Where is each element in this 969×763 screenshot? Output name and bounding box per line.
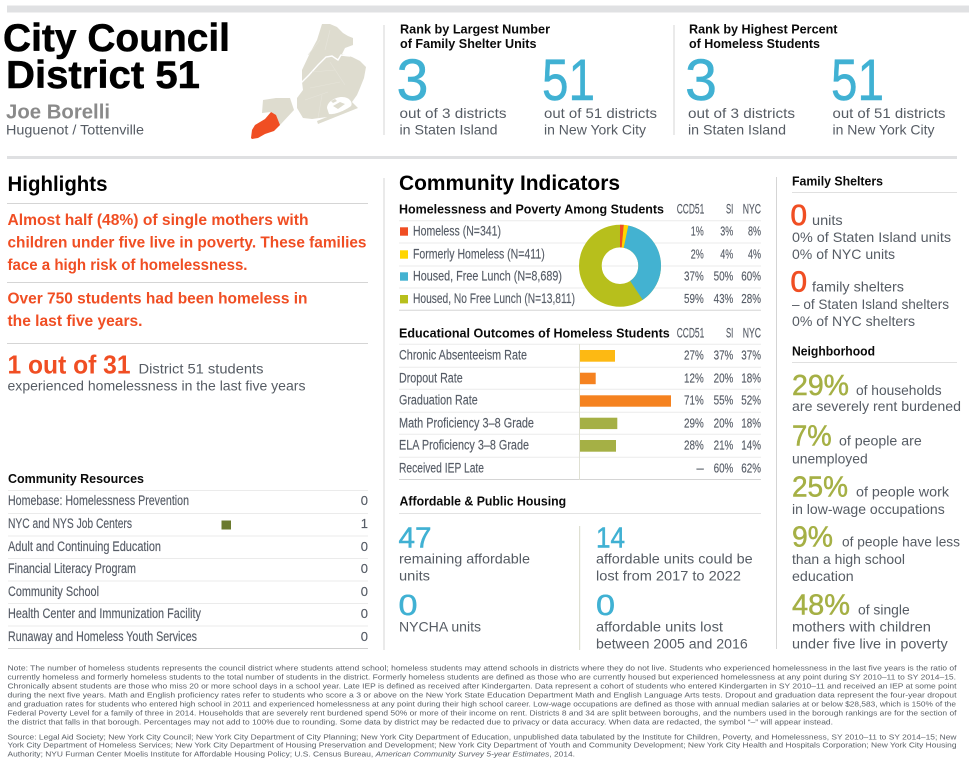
row: housed, no free lunch: Housed, No Free Lunch (N=13,811) xyxy=(413,291,575,306)
resource row: job centers xyxy=(8,516,368,531)
row: ELA proficiency: 21% xyxy=(714,438,734,453)
stat: rent burdened: 29% xyxy=(792,370,849,402)
row: received IEP late: Received IEP Late xyxy=(399,460,484,475)
text block: sources: Authority; NYU Furman Center Moelis Institute for Affordable Housing Policy; U.S. Census Bureau, American Community Survey 5-year Estimates , 2014. xyxy=(8,750,575,759)
row: math proficiency: Math Proficiency 3–8 Grade xyxy=(399,416,534,431)
stat: units could be lost: 14 xyxy=(596,523,625,555)
row: math proficiency: 29% xyxy=(684,416,704,431)
rank heading: Rank by Highest Percent xyxy=(689,22,838,36)
rank stat: Staten Island xyxy=(396,48,506,138)
resource row: community school: 0 xyxy=(361,584,368,599)
stat: rent burdened: are severely rent burdened xyxy=(792,398,961,414)
row: housed, free lunch: 37% xyxy=(684,268,704,283)
stat: less than high school: of people have less xyxy=(842,534,960,550)
row: formerly homeless: 4% xyxy=(748,246,761,261)
resource row: job centers: NYC and NYS Job Centers xyxy=(8,516,132,531)
row: homeless: 1% xyxy=(691,223,704,238)
heading: highlights: Highlights xyxy=(8,173,108,196)
stat: remaining affordable units: remaining affordable xyxy=(399,551,530,567)
stat: less than high school xyxy=(792,522,960,584)
row: chronic absenteeism: 27% xyxy=(684,347,704,362)
stat: units lost: affordable units lost xyxy=(596,619,723,635)
rank stat: New York City: in New York City xyxy=(832,122,934,138)
panel: rank by highest percent of homeless students xyxy=(674,22,946,138)
rank stat: Staten Island: 3 xyxy=(396,48,428,113)
stat: units xyxy=(790,200,951,262)
resource row: Homebase: 0 xyxy=(361,493,368,508)
stat: single mothers in poverty: 48% xyxy=(792,589,850,621)
row: dropout: 18% xyxy=(741,371,761,386)
row: ELA proficiency: 14% xyxy=(741,438,761,453)
resource row: adult education: Adult and Continuing Education xyxy=(8,539,161,554)
row: housed, free lunch: 50% xyxy=(714,268,734,283)
row: graduation: 52% xyxy=(741,393,761,408)
title: City Council xyxy=(3,17,230,60)
rank heading: of Homeless Students xyxy=(689,36,820,51)
row: housed, no free lunch: 59% xyxy=(684,291,704,306)
text block: note: Chronically absent students are those who miss 20 or more school days in a school year. Late IEP is defined as received after Kindergarten. Data represent a cohort of students who entered Kindergarten in SY 2010–11 and received an IEP at some point xyxy=(8,681,957,690)
resource row: Homebase: Homebase: Homelessness Prevention xyxy=(8,493,189,508)
rank stat: New York City: out of 51 districts xyxy=(832,105,946,121)
resource row: adult education: 0 xyxy=(361,539,368,554)
row: graduation: Graduation Rate xyxy=(399,393,478,408)
title: District 51 xyxy=(6,54,200,97)
highlight: students homeless: the last five years. xyxy=(8,313,142,330)
text block: sources: York City Department of Homeless Services; New York City Department of Housing Preservation and Development; New York City Department of Youth and Community Development; New York City Health and Hospitals Corporation; New York City Housing xyxy=(8,741,956,750)
rank stat: Staten Island: in Staten Island xyxy=(400,122,498,138)
stat: less than high school: 9% xyxy=(792,522,833,554)
row: homeless: Homeless (N=341) xyxy=(413,223,501,238)
rank stat: New York City: in New York City xyxy=(544,122,646,138)
stat: units: 0% of NYC units xyxy=(792,246,895,262)
stat: remaining affordable units: units xyxy=(399,568,430,584)
stat: units: 0% of Staten Island units xyxy=(792,229,951,245)
rank stat: Staten Island xyxy=(685,48,795,138)
row: received IEP late: 62% xyxy=(741,460,761,475)
resource row: job centers: 1 xyxy=(361,516,368,531)
stat: family shelters: – of Staten Island shelters xyxy=(792,296,949,312)
rank stat: Staten Island: out of 3 districts xyxy=(688,105,795,121)
highlight: 1 out of 31 xyxy=(8,350,306,394)
rank stat: New York City xyxy=(831,48,946,138)
subheading with column labels: NYC xyxy=(743,326,761,341)
heading: community resources: Community Resources xyxy=(8,471,144,486)
stat: units could be lost: lost from 2017 to 2022 xyxy=(596,568,741,584)
stat: rent burdened xyxy=(792,370,961,414)
row: chronic absenteeism: 37% xyxy=(714,347,734,362)
rank stat: New York City: 51 xyxy=(831,48,884,113)
stat: single mothers in poverty: under five live in poverty xyxy=(792,636,948,652)
resource row: adult education xyxy=(8,539,368,554)
resource row: community school xyxy=(8,584,368,599)
text block: note: during the next five years. Math and English proficiency rates refer to students who score a 3 or above on the New York State Education Department Math and English Language Arts tests. Dropout and graduation data represent the four-year dropout xyxy=(8,690,958,699)
highlight: single mothers in poverty: Almost half (48%) of single mothers with xyxy=(8,212,308,229)
resource row: health center xyxy=(8,606,368,621)
panel: educational outcomes of homeless students xyxy=(399,326,761,480)
stat: low-wage occupations: in low-wage occupations xyxy=(792,501,945,517)
row: graduation xyxy=(399,393,761,408)
text block: note: Federal Poverty Level for a family of three in 2014. Households that are severely rent burdened spend 50% or more of their income on rent. Districts 8 and 34 are split between boroughs, and the numbers used in the borough rankings are for the section of xyxy=(8,708,957,717)
panel: highlights xyxy=(7,173,368,394)
stat: NYCHA units: NYCHA units xyxy=(399,619,481,635)
subheading with column labels: Educational Outcomes of Homeless Students xyxy=(399,326,670,341)
row: housed, no free lunch: 43% xyxy=(714,291,734,306)
row: ELA proficiency xyxy=(399,438,761,453)
header: district title xyxy=(3,17,230,137)
row: chronic absenteeism: Chronic Absenteeism Rate xyxy=(399,347,527,362)
stat: remaining affordable units xyxy=(398,523,530,584)
text block: sources xyxy=(8,732,957,759)
row: homeless xyxy=(400,223,761,238)
text block: note: Note: The number of homeless students represents the council district where students attend school; homeless students may attend schools in districts where they do not live. Students who experienced homelessness in the last five years is the ratio of xyxy=(8,663,957,672)
rank stat: New York City xyxy=(542,48,657,138)
stat: less than high school: education xyxy=(792,568,854,584)
subheading with column labels: SI xyxy=(726,202,733,217)
resource row: health center: Health Center and Immunization Facility xyxy=(8,606,201,621)
row: homeless: 8% xyxy=(748,223,761,238)
stat: unemployed xyxy=(792,421,922,466)
subheading with column labels: SI xyxy=(726,326,733,341)
text block: note xyxy=(8,663,958,726)
stat: rent burdened: of households xyxy=(856,382,942,398)
heading: neighborhood: Neighborhood xyxy=(792,344,875,359)
rank stat: Staten Island: out of 3 districts xyxy=(400,105,506,121)
stat: units lost xyxy=(596,590,748,651)
heading: family shelters: Family Shelters xyxy=(792,174,883,189)
rank heading: of Family Shelter Units xyxy=(400,36,536,51)
row: ELA proficiency: 28% xyxy=(684,438,704,453)
resource row: health center: 0 xyxy=(361,606,368,621)
stat: family shelters: family shelters xyxy=(812,279,904,295)
row: math proficiency xyxy=(399,416,761,431)
stat: units lost: between 2005 and 2016 xyxy=(596,635,748,651)
row: graduation: 55% xyxy=(714,393,734,408)
rank stat: New York City: 51 xyxy=(542,48,595,113)
resource row: Homebase xyxy=(8,493,368,508)
resource row: runaway services: Runaway and Homeless Youth Services xyxy=(8,629,197,644)
row: dropout: Dropout Rate xyxy=(399,371,463,386)
row: housed, no free lunch xyxy=(400,291,761,306)
resource row: financial literacy xyxy=(8,561,368,576)
highlight: 1 out of 31: experienced homelessness in the last five years xyxy=(8,378,306,394)
panel: community resources xyxy=(8,471,368,648)
row: received IEP late: – xyxy=(696,460,704,475)
highlight: single mothers in poverty: children under five live in poverty. These families xyxy=(8,235,366,252)
row: dropout: 20% xyxy=(714,371,734,386)
stat: low-wage occupations: of people work xyxy=(856,484,950,500)
title xyxy=(3,17,230,97)
row: housed, free lunch xyxy=(400,268,761,283)
subheading with column labels: CCD51 xyxy=(677,202,704,217)
row: chronic absenteeism: 37% xyxy=(741,347,761,362)
rank stat: Staten Island: 3 xyxy=(685,48,717,113)
rank heading xyxy=(400,22,550,51)
text block: sources: Source: Legal Aid Society; New York City Council; New York City Department of City Planning; New York City Department of Education, unpublished data tabulated by the Institute for Children, Poverty, and Homelessness, SY 2010–11 to SY 2014–15; New xyxy=(8,732,957,741)
text block: note: the district that falls in that borough. Percentages may not add to 100% due to rounding. Some data by district may be redacted due to privacy or data accuracy. When data are redacted, the symbol “–” will appear instead. xyxy=(8,717,833,726)
subheading with column labels: CCD51 xyxy=(677,326,704,341)
panel: neighborhood xyxy=(792,344,961,652)
row: received IEP late: 60% xyxy=(714,460,734,475)
resource row: runaway services xyxy=(8,629,368,644)
highlight: students homeless xyxy=(8,291,308,330)
row: math proficiency: 20% xyxy=(714,416,734,431)
row: dropout: 12% xyxy=(684,371,704,386)
stat: units: 0 xyxy=(790,200,807,232)
panel: family shelters xyxy=(790,174,957,329)
text block: note: currently homeless and formerly homeless students to the total number of students in the district. Formerly homeless students are defined as those who are currently housed but experienced homelessness at any point during SY 2010–11 to SY 2014–15. xyxy=(8,672,956,681)
resource row: community school: Community School xyxy=(8,584,99,599)
resource row: financial literacy: Financial Literacy Program xyxy=(8,561,136,576)
highlight: 1 out of 31: District 51 students xyxy=(138,361,264,377)
stat: single mothers in poverty: mothers with children xyxy=(792,619,931,635)
rank heading: Rank by Largest Number xyxy=(400,22,550,36)
stat: single mothers in poverty: of single xyxy=(858,601,910,617)
row: formerly homeless xyxy=(400,246,761,261)
row: ELA proficiency: ELA Proficiency 3–8 Grade xyxy=(399,438,529,453)
row: formerly homeless: 4% xyxy=(720,246,734,261)
stat: unemployed: 7% xyxy=(792,421,832,453)
stat: low-wage occupations xyxy=(792,472,950,517)
panel: homelessness and poverty among students xyxy=(399,202,761,310)
row: received IEP late xyxy=(399,460,761,475)
heading: community indicators: Community Indicators xyxy=(399,171,620,195)
row: dropout xyxy=(399,371,761,386)
stat: low-wage occupations: 25% xyxy=(792,472,848,504)
row: formerly homeless: Formerly Homeless (N=411) xyxy=(413,246,545,261)
stat: units lost: 0 xyxy=(596,590,615,622)
rank stat: New York City: out of 51 districts xyxy=(544,105,657,121)
stat: remaining affordable units: 47 xyxy=(398,523,432,555)
highlight: students homeless: Over 750 students had been homeless in xyxy=(8,291,308,308)
stat: less than high school: than a high school xyxy=(792,551,905,567)
stat: units could be lost xyxy=(596,523,753,584)
resource row: financial literacy: 0 xyxy=(361,561,368,576)
donut chart xyxy=(590,236,650,295)
resource row: runaway services: 0 xyxy=(361,629,368,644)
highlight: single mothers in poverty: face a high risk of homelessness. xyxy=(8,257,248,274)
row: housed, no free lunch: 28% xyxy=(741,291,761,306)
stat: family shelters: 0% of NYC shelters xyxy=(792,313,915,329)
stat: NYCHA units: 0 xyxy=(398,590,418,622)
row: housed, free lunch: Housed, Free Lunch (N=8,689) xyxy=(413,268,562,283)
highlight: single mothers in poverty xyxy=(8,212,366,274)
row: formerly homeless: 2% xyxy=(691,246,704,261)
map: New York City with district 51 highlighted xyxy=(251,24,366,139)
stat: NYCHA units xyxy=(398,590,481,635)
council member name: Joe Borelli xyxy=(6,101,110,124)
neighborhood name: Huguenot / Tottenville xyxy=(6,121,144,137)
stat: units: units xyxy=(812,212,843,228)
row: homeless: 3% xyxy=(720,223,734,238)
subheading with column labels: NYC xyxy=(743,202,761,217)
row: chronic absenteeism xyxy=(399,347,761,362)
text block: note: and graduation rates for students who entered high school in 2011 and experienced homelessness at any point during their high school career. Low-wage occupations are defined as those with annual median salaries at or below $28,583, which is 150% of the xyxy=(8,699,956,708)
stat: units could be lost: affordable units could be xyxy=(596,551,753,567)
highlight: 1 out of 31: 1 out of 31 xyxy=(8,350,130,380)
row: housed, free lunch: 60% xyxy=(741,268,761,283)
stat: family shelters: 0 xyxy=(790,267,807,299)
panel: rank by largest number of family shelter units xyxy=(384,22,657,138)
stat: unemployed: unemployed xyxy=(792,450,868,466)
rank heading xyxy=(689,22,838,51)
row: math proficiency: 18% xyxy=(741,416,761,431)
stat: family shelters xyxy=(790,267,949,329)
rank stat: Staten Island: in Staten Island xyxy=(688,122,786,138)
panel: affordable and public housing xyxy=(398,494,761,651)
heading: affordable and public housing: Affordable & Public Housing xyxy=(400,494,566,509)
stat: unemployed: of people are xyxy=(839,433,922,449)
stat: single mothers in poverty xyxy=(792,589,948,652)
subheading with column labels: Homelessness and Poverty Among Students xyxy=(399,202,664,217)
row: graduation: 71% xyxy=(684,393,704,408)
